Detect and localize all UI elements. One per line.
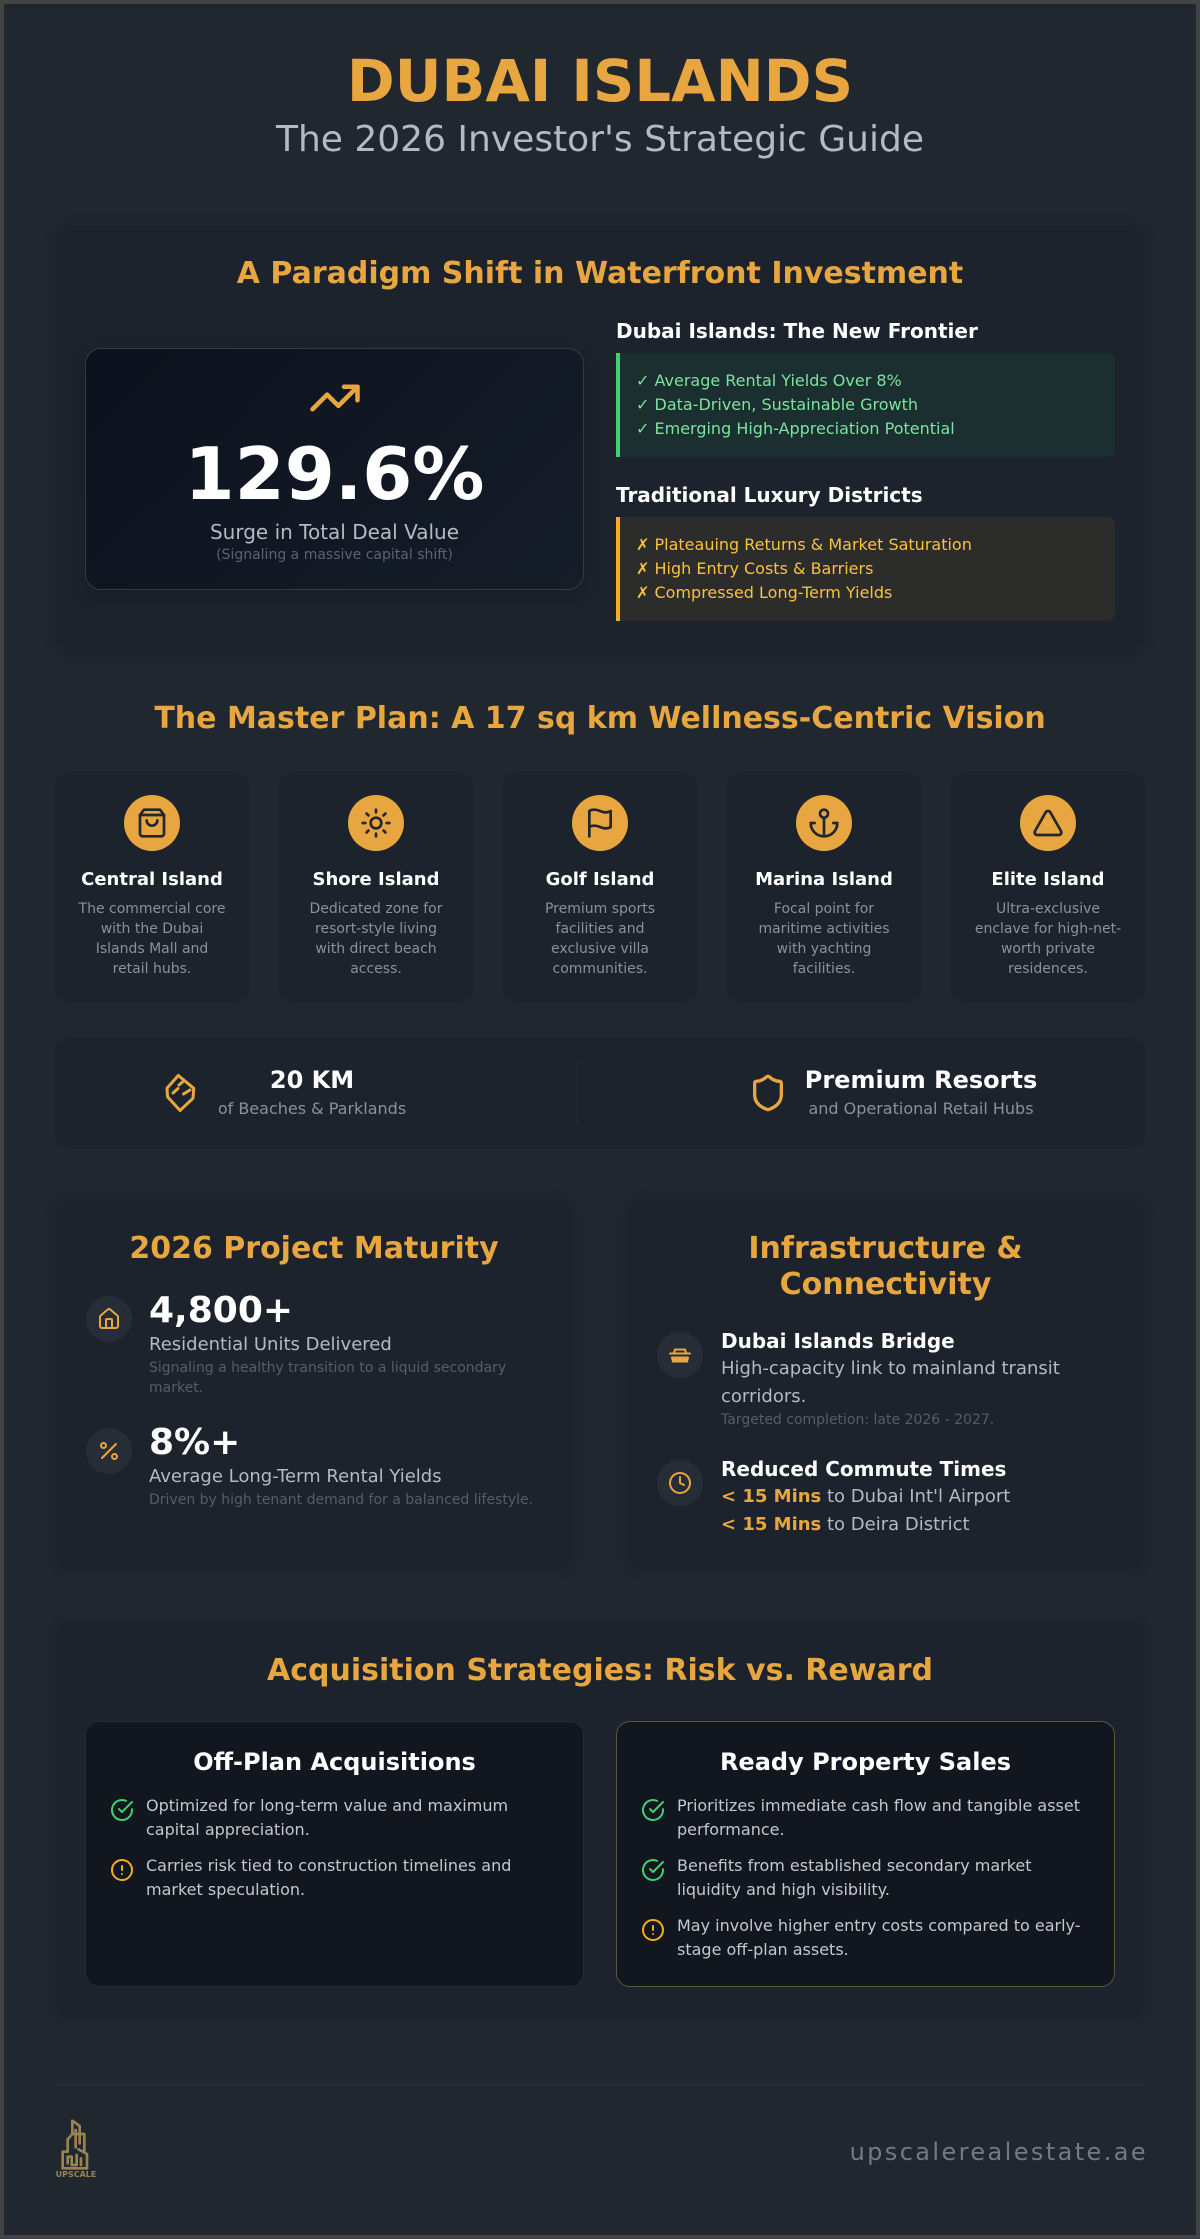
icon: house: [86, 1296, 132, 1342]
heading: Connectivity: [780, 1267, 991, 1302]
icon: bridge: [657, 1332, 703, 1378]
island description: [758, 901, 890, 977]
icon: triangle: [1020, 795, 1076, 851]
point text: [146, 1796, 508, 1839]
island description: [78, 901, 225, 977]
metric note: Driven by high tenant demand for a balanced lifestyle.: [149, 1492, 533, 1508]
heading: Infrastructure &: [748, 1231, 1023, 1266]
logo mark: building: [61, 2119, 88, 2170]
list: traditional: [616, 517, 1115, 621]
list: traditional: ✗ Compressed Long-Term Yields: [636, 583, 892, 602]
metric label: Average Long-Term Rental Yields: [149, 1466, 442, 1487]
point: [642, 1796, 1080, 1839]
item text: < 15 Mins to Dubai Int'l Airport: [721, 1486, 1010, 1507]
icon: sun: [348, 795, 404, 851]
panel: paradigm shift: [54, 224, 1146, 655]
island description: enclave for high-net-: [975, 921, 1121, 937]
island description: with yachting: [777, 941, 871, 957]
list: new frontier: ✓ Emerging High-Appreciation Potential: [636, 419, 955, 438]
card: off-plan: [85, 1721, 584, 1987]
metric note: Signaling a healthy transition to a liquid secondary: [149, 1360, 506, 1376]
item text: < 15 Mins to Deira District: [721, 1514, 970, 1535]
website: upscalerealestate.ae: [850, 2138, 1148, 2166]
heading: master plan: The Master Plan: A 17 sq km Wellness-Centric Vision: [154, 701, 1046, 736]
item text: [721, 1486, 1010, 1535]
point text: [677, 1916, 1080, 1959]
metric value: 4,800+: [149, 1290, 293, 1331]
island description: Premium sports: [545, 901, 655, 917]
metric: rental yields: [86, 1422, 533, 1508]
subtitle: The 2026 Investor's Strategic Guide: [276, 119, 924, 160]
card title: Off-Plan Acquisitions: [193, 1748, 476, 1776]
island description: access.: [350, 961, 402, 977]
point text: performance.: [677, 1820, 785, 1839]
list: traditional: ✗ Plateauing Returns & Market Saturation: [636, 535, 972, 554]
island description: with direct beach: [315, 941, 437, 957]
point text: liquidity and high visibility.: [677, 1880, 890, 1899]
point text: stage off-plan assets.: [677, 1940, 849, 1959]
point text: May involve higher entry costs compared to early-: [677, 1916, 1080, 1935]
stats bar: [54, 1037, 1146, 1149]
heading: [748, 1231, 1023, 1302]
island description: with the Dubai: [101, 921, 203, 937]
item text: High-capacity link to mainland transit: [721, 1358, 1060, 1379]
point text: [677, 1856, 1032, 1899]
icon: shield: [753, 1074, 783, 1112]
island description: [975, 901, 1121, 977]
point text: Prioritizes immediate cash flow and tangible asset: [677, 1796, 1080, 1815]
metric note: market.: [149, 1380, 203, 1396]
card: central island: [54, 771, 250, 1003]
metric note: [149, 1360, 506, 1396]
panel: acquisition strategies: [54, 1621, 1146, 2020]
point: [111, 1856, 511, 1899]
header: [276, 48, 924, 160]
metric label: Residential Units Delivered: [149, 1334, 392, 1355]
island name: Central Island: [81, 869, 223, 890]
island description: residences.: [1008, 961, 1088, 977]
item note: Targeted completion: late 2026 - 2027.: [721, 1412, 994, 1428]
stat caption: of Beaches & Parklands: [218, 1099, 406, 1118]
subheading: traditional: Traditional Luxury Districts: [616, 483, 923, 507]
icon: ruler: [166, 1074, 196, 1112]
island description: The commercial core: [79, 901, 225, 917]
subheading: new frontier: Dubai Islands: The New Frontier: [616, 319, 978, 343]
point: [642, 1856, 1032, 1899]
island description: Islands Mall and: [96, 941, 208, 957]
card: golf island: [502, 771, 698, 1003]
icon: clock: [657, 1460, 703, 1506]
stat value: Premium Resorts: [805, 1066, 1037, 1094]
island name: Marina Island: [755, 869, 893, 890]
island description: communities.: [553, 961, 647, 977]
point text: Optimized for long-term value and maximum: [146, 1796, 508, 1815]
point text: [146, 1856, 511, 1899]
item text: corridors.: [721, 1386, 806, 1407]
heading: A Paradigm Shift in Waterfront Investment: [237, 256, 963, 291]
heading: Acquisition Strategies: Risk vs. Reward: [267, 1653, 933, 1688]
icon: shopping bag: [124, 795, 180, 851]
point text: market speculation.: [146, 1880, 305, 1899]
card: marina island: [726, 771, 922, 1003]
stat: premium resorts: [753, 1066, 1037, 1118]
divider: [577, 1062, 578, 1125]
footer divider line: [54, 2084, 1146, 2085]
icon: flag: [572, 795, 628, 851]
island description: [545, 901, 655, 977]
icon: alert: [111, 1859, 133, 1881]
stat: 20 km: [166, 1066, 406, 1118]
island description: maritime activities: [758, 921, 890, 937]
metric: units delivered: [86, 1290, 506, 1396]
item: commute: [657, 1457, 1010, 1535]
island description: Dedicated zone for: [310, 901, 442, 917]
card: ready property: [616, 1721, 1115, 1987]
card: elite island: [950, 771, 1146, 1003]
big number: 129.6%: [185, 432, 484, 516]
point: [642, 1916, 1080, 1959]
icon: check: [110, 1799, 133, 1821]
island description: facilities.: [793, 961, 855, 977]
metric value: 8%+: [149, 1422, 240, 1463]
stat card: 129.6%: [85, 348, 584, 590]
point text: [677, 1796, 1080, 1839]
island name: Elite Island: [991, 869, 1105, 890]
heading: 2026 Project Maturity: [129, 1231, 499, 1266]
island name: Golf Island: [546, 869, 654, 890]
point: [110, 1796, 508, 1839]
list: traditional: ✗ High Entry Costs & Barriers: [636, 559, 873, 578]
stat value: 20 KM: [270, 1066, 354, 1094]
list: new frontier: ✓ Average Rental Yields Over 8%: [636, 371, 902, 390]
island description: [310, 901, 442, 977]
card title: Ready Property Sales: [720, 1748, 1011, 1776]
island description: resort-style living: [315, 921, 437, 937]
item title: Dubai Islands Bridge: [721, 1329, 955, 1353]
item: bridge: [657, 1329, 1060, 1428]
stat note: (Signaling a massive capital shift): [216, 547, 453, 563]
point text: Carries risk tied to construction timelines and: [146, 1856, 511, 1875]
card: shore island: [278, 771, 474, 1003]
icon: check: [642, 1859, 664, 1881]
island description: exclusive villa: [551, 941, 649, 957]
logo wordmark: UPSCALE: [56, 2170, 96, 2179]
island description: retail hubs.: [113, 961, 191, 977]
list: new frontier: ✓ Data-Driven, Sustainable Growth: [636, 395, 918, 414]
point text: capital appreciation.: [146, 1820, 310, 1839]
island description: facilities and: [556, 921, 644, 937]
icon: anchor: [796, 795, 852, 851]
item text: [721, 1358, 1060, 1407]
island description: Ultra-exclusive: [996, 901, 1100, 917]
stat caption: and Operational Retail Hubs: [808, 1099, 1034, 1118]
logo: [56, 2119, 96, 2179]
panel: project maturity: [54, 1199, 574, 1571]
item title: Reduced Commute Times: [721, 1457, 1006, 1481]
stat label: Surge in Total Deal Value: [210, 520, 459, 544]
icon: trending up: [310, 384, 360, 412]
island name: Shore Island: [313, 869, 439, 890]
island description: Focal point for: [774, 901, 874, 917]
icon: alert: [642, 1919, 664, 1941]
title: DUBAI ISLANDS: [347, 48, 853, 115]
island description: worth private: [1001, 941, 1095, 957]
icon: percent: [86, 1428, 132, 1474]
panel: infrastructure: [626, 1199, 1146, 1571]
list: new frontier: [616, 353, 1115, 457]
icon: check: [642, 1799, 664, 1821]
point text: Benefits from established secondary market: [677, 1856, 1032, 1875]
